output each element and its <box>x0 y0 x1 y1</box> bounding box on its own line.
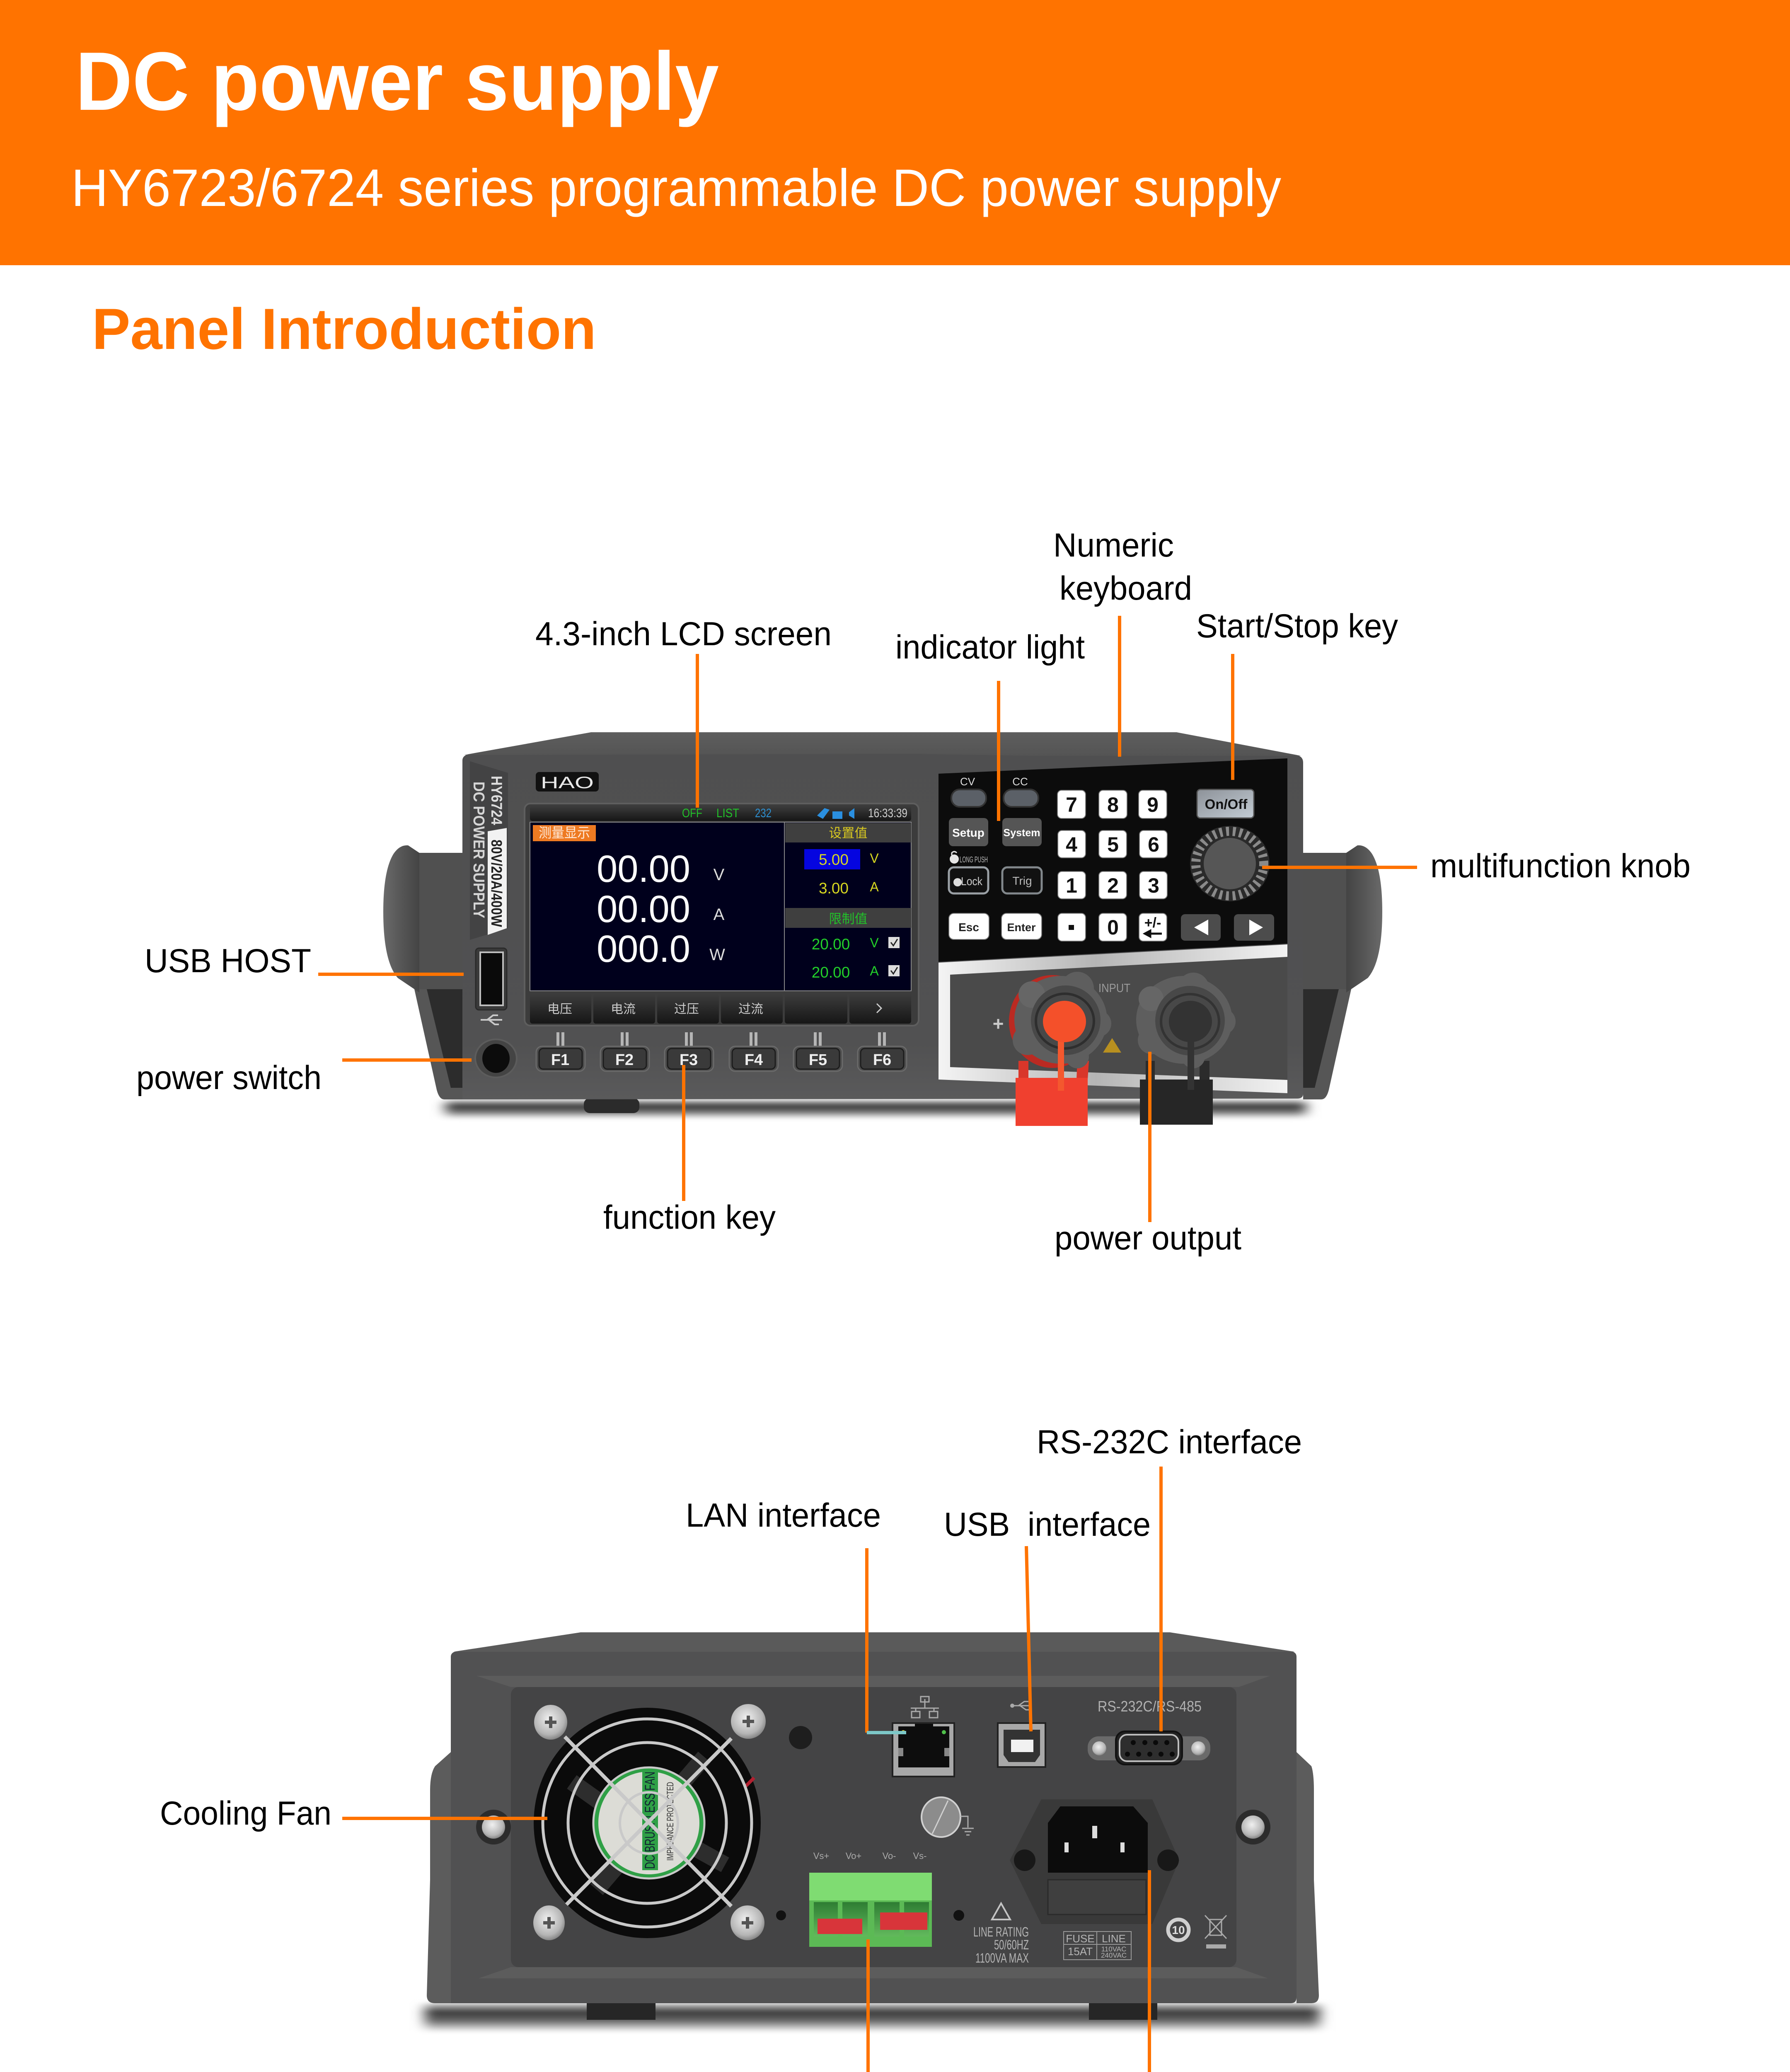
rear shadow <box>425 2003 1320 2032</box>
model strip: HY6724 <box>488 776 505 825</box>
numeric keys: 6 <box>1148 833 1159 856</box>
label: start/stop key: Start/Stop key <box>1196 608 1398 645</box>
label: USB HOST: USB HOST <box>145 942 311 980</box>
set and limit values: 3.00 <box>819 880 849 897</box>
function keys: F3 <box>680 1051 698 1069</box>
USB interface <box>998 1702 1045 1767</box>
label: 4.3-inch LCD screen: 4.3-inch LCD screen <box>535 615 832 653</box>
line rating text <box>973 1903 1029 1965</box>
LCD screen <box>525 804 919 1026</box>
rear chassis <box>451 1632 1297 2003</box>
soft key labels: 过压 <box>674 1002 699 1016</box>
label: numeric keyboard: Numeric <box>1053 527 1174 564</box>
CV and CC indicator lights <box>951 775 1038 807</box>
label: indicator light: indicator light <box>895 629 1085 666</box>
title: DC power supply <box>75 35 719 128</box>
setup and system keys: System <box>1004 827 1040 839</box>
measurement area: A <box>714 905 725 924</box>
header banner <box>0 0 1790 265</box>
right handle <box>1303 845 1382 1099</box>
label: power output (rear) <box>775 1939 972 2072</box>
set and limit values: V <box>870 851 879 866</box>
fuse table: LINE <box>1102 1932 1126 1945</box>
esc and enter keys <box>949 913 1042 939</box>
set and limit values: A <box>870 963 879 978</box>
label: USB interface <box>944 1506 1151 1731</box>
compliance icons: 10 <box>1172 1924 1185 1936</box>
rear side handles <box>427 1752 1319 2003</box>
lock hint <box>950 852 988 864</box>
numeric keys: +/- <box>1144 915 1161 931</box>
subtitle: HY6723/6724 series programmable DC power supply <box>71 158 1281 217</box>
section heading: Panel Introduction <box>92 296 596 361</box>
numeric keys: 5 <box>1107 833 1119 856</box>
function keys: F6 <box>873 1051 891 1069</box>
arrow keys <box>1181 914 1274 941</box>
set and limit values: V <box>870 935 879 950</box>
black output terminal <box>1136 973 1236 1125</box>
function keys <box>536 1032 907 1071</box>
status bar: 232 <box>755 806 772 820</box>
model strip: 80V/20A/400W <box>488 840 505 927</box>
measurement area: 00.00 <box>597 848 690 890</box>
recessed rear panel <box>511 1687 1236 1967</box>
label: LAN interface: LAN interface <box>686 1497 881 1534</box>
numeric keys: 0 <box>1107 916 1119 939</box>
numeric keys: 9 <box>1147 793 1159 816</box>
line rating text: 1100VA MAX <box>975 1951 1029 1965</box>
label: power output (front): power output <box>1055 1220 1241 1257</box>
lock hint: LONG PUSH <box>960 855 988 864</box>
label: multifunction knob: multifunction knob <box>1430 847 1691 885</box>
soft key labels: 电流 <box>611 1002 636 1016</box>
set and limit values: A <box>870 879 879 894</box>
LAN interface <box>893 1697 954 1777</box>
numeric keys: 4 <box>1066 833 1077 856</box>
fuse table <box>1064 1932 1131 1960</box>
esc and enter keys: Esc <box>958 921 979 934</box>
warning icon <box>1103 1038 1121 1053</box>
measurement area <box>530 822 784 991</box>
On/Off key <box>1197 789 1254 818</box>
output panel <box>939 944 1287 1126</box>
fuse table: 15AT <box>1068 1945 1093 1958</box>
fan guard <box>543 1719 752 1927</box>
top surface <box>464 732 1301 756</box>
label: cooling fan: Cooling Fan <box>160 1795 331 1832</box>
green output connector <box>809 1851 932 1947</box>
chassis <box>462 732 1303 1099</box>
USB host port <box>476 948 507 1024</box>
RS-232C connector: RS-232C/RS-485 <box>1098 1698 1202 1715</box>
label: power socket <box>1086 1870 1279 2072</box>
CV and CC indicator lights: CV <box>960 775 975 788</box>
On/Off key: On/Off <box>1205 796 1248 812</box>
rear panel device <box>425 1632 1320 2032</box>
numeric keys: 2 <box>1107 874 1119 897</box>
measurement area: 000.0 <box>597 928 690 970</box>
label: USB interface: USB interface <box>944 1506 1151 1543</box>
output panel: INPUT <box>1098 982 1130 995</box>
model strip: DC POWER SUPPLY <box>470 782 487 918</box>
set and limit values: 20.00 <box>812 936 850 953</box>
rear feet <box>587 2002 1157 2020</box>
fan hub label <box>593 1767 704 1878</box>
label: numeric keyboard: keyboard <box>1059 570 1192 607</box>
status bar: 16:33:39 <box>868 806 907 820</box>
numeric keys: 3 <box>1148 874 1159 897</box>
set and limit values: 设置值 <box>829 826 868 840</box>
fan hub label: DC BRUSHLESS FAN <box>642 1772 658 1869</box>
set and limit values <box>784 822 911 991</box>
set and limit values: 20.00 <box>812 964 850 981</box>
lock and trig keys: Trig <box>1012 874 1032 887</box>
multifunction knob <box>1190 826 1270 901</box>
status bar: OFF <box>682 806 702 820</box>
front panel device <box>383 732 1382 1126</box>
fuse table: FUSE <box>1066 1932 1095 1945</box>
function keys: F4 <box>745 1051 763 1069</box>
numeric keys: 1 <box>1066 874 1077 897</box>
numeric keys: 7 <box>1066 793 1077 816</box>
status bar: LIST <box>716 806 739 820</box>
function keys: F2 <box>615 1051 634 1069</box>
fan screws <box>533 1704 766 1940</box>
setup and system keys <box>949 818 1042 846</box>
ground knob <box>922 1797 974 1837</box>
side screws <box>476 1810 1270 1844</box>
green output connector: Vo+ <box>846 1851 861 1861</box>
RS-232C connector <box>1088 1698 1210 1765</box>
HAO logo: HAO <box>541 774 594 792</box>
power socket <box>1010 1799 1179 1924</box>
left handle <box>383 845 462 1099</box>
soft key labels: 过流 <box>738 1002 763 1016</box>
label: numeric keyboard <box>1053 527 1192 757</box>
function keys: F5 <box>809 1051 827 1069</box>
fuse table: 240VAC <box>1101 1951 1127 1959</box>
CV and CC indicator lights: CC <box>1012 775 1028 788</box>
soft key labels: 电压 <box>547 1002 572 1016</box>
green output connector: Vs- <box>913 1851 926 1861</box>
measurement area: W <box>709 946 725 964</box>
esc and enter keys: Enter <box>1007 921 1036 934</box>
small panel screws and holes <box>776 1726 964 1921</box>
keypad panel <box>939 758 1287 962</box>
model strip <box>470 761 508 940</box>
label: function key: function key <box>603 1199 776 1236</box>
line rating text: 50/60HZ <box>994 1937 1029 1952</box>
feet <box>584 1098 639 1113</box>
green output connector: Vs+ <box>813 1851 829 1861</box>
power switch <box>475 1039 517 1077</box>
function keys: F1 <box>551 1051 569 1069</box>
lock and trig keys <box>949 867 1042 893</box>
rear top surface <box>454 1632 1295 1652</box>
red output terminal <box>1009 972 1111 1126</box>
measurement area: 00.00 <box>597 888 690 930</box>
cooling fan <box>533 1704 766 1940</box>
green output connector: Vo- <box>882 1851 896 1861</box>
status bar <box>530 806 911 821</box>
fuse table: 110VAC <box>1101 1945 1126 1953</box>
line rating text: LINE RATING <box>973 1924 1029 1939</box>
lock and trig keys: Lock <box>961 875 983 888</box>
set and limit values: 5.00 <box>819 851 849 868</box>
HAO logo <box>536 772 599 792</box>
numeric keys: 8 <box>1107 793 1119 816</box>
label: RS-232C interface: RS-232C interface <box>1037 1423 1302 1461</box>
compliance icons <box>1168 1915 1226 1949</box>
fan hub label: IMPEDANCE PROTECTED <box>665 1782 675 1861</box>
setup and system keys: Setup <box>952 826 984 839</box>
device shadow <box>445 1100 1306 1119</box>
set and limit values: 限制值 <box>829 912 868 926</box>
measurement area: 测量显示 <box>539 825 590 840</box>
label: power switch: power switch <box>136 1059 322 1097</box>
measurement area: V <box>714 866 725 884</box>
numeric keys <box>1057 790 1167 941</box>
soft key labels <box>530 993 911 1024</box>
output panel: + <box>993 1013 1004 1034</box>
